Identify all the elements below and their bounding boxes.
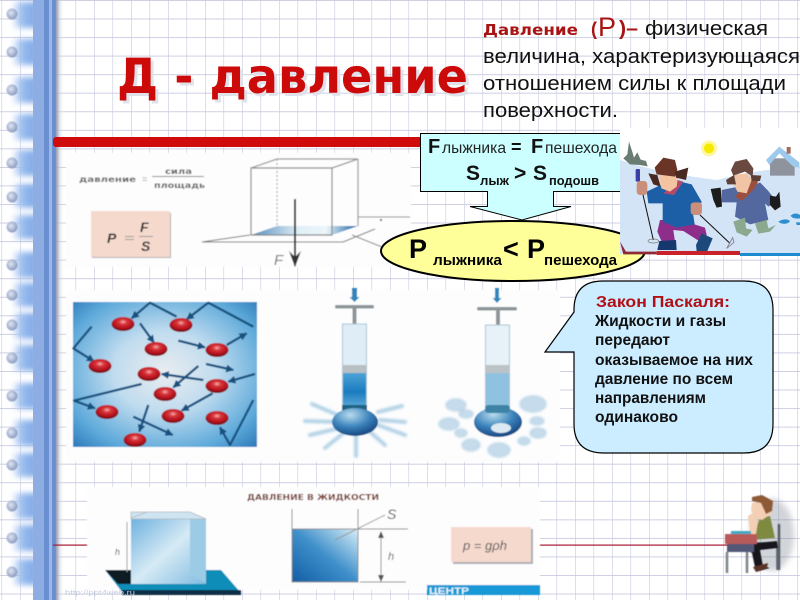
watermark: http://ppt4web.ru xyxy=(65,588,135,597)
logo strip xyxy=(427,585,540,596)
panel: pressure formula and box xyxy=(66,153,411,269)
definition of pressure: величина, характеризующаяся xyxy=(483,46,800,68)
liquid cube on plate: h xyxy=(115,547,120,557)
pedestrian xyxy=(711,159,781,237)
boy xyxy=(752,516,775,540)
chair xyxy=(778,524,780,570)
panel: Pascal law illustrations xyxy=(66,288,560,462)
definition of pressure: ( xyxy=(591,19,597,39)
formula in words: площадь xyxy=(154,181,205,190)
callout arrow box: force and area: лыжника xyxy=(442,140,506,157)
red thin line xyxy=(53,544,743,546)
syringe with foam xyxy=(439,288,546,457)
vessel with depth h: h xyxy=(388,551,394,563)
callout arrow box: force and area xyxy=(420,134,622,220)
red rule xyxy=(53,137,425,147)
definition of pressure: физическая xyxy=(645,18,768,40)
sun xyxy=(701,140,717,156)
formula in words: = xyxy=(142,174,147,184)
syringe with water jets xyxy=(305,288,405,456)
notebook binding strip xyxy=(6,0,64,600)
formula in words: сила xyxy=(165,167,192,176)
formula card p = gρh: р = gρh xyxy=(462,538,507,553)
callout arrow box: force and area: подошв xyxy=(549,173,599,188)
callout arrow box: force and area: S xyxy=(466,162,480,185)
definition of pressure: Давление xyxy=(483,21,578,39)
title: Д - давление xyxy=(117,49,468,105)
callout: Pascal's law: направлениям xyxy=(595,390,706,407)
callout: Pascal's law: одинаково xyxy=(595,409,678,426)
callout: Pascal's law: давление по всем xyxy=(595,371,733,388)
yellow ellipse: pressure comparison xyxy=(381,221,645,281)
formula card p = gρh xyxy=(451,527,533,564)
formula in words: давление xyxy=(79,175,137,184)
definition of pressure: поверхности. xyxy=(483,100,618,122)
formula card P = F/S: P xyxy=(107,230,117,246)
yellow ellipse: pressure comparison: лыжника xyxy=(433,253,503,269)
yellow ellipse: pressure comparison: Р xyxy=(527,234,545,264)
callout arrow box: force and area: лыж xyxy=(480,173,510,188)
definition of pressure: отношением силы к площади xyxy=(483,73,786,95)
desk xyxy=(731,531,751,534)
logo strip: ЦЕНТР xyxy=(429,586,469,596)
panel: pressure in liquid xyxy=(87,487,540,596)
callout arrow box: force and area: = xyxy=(511,137,522,157)
liquid cube on plate xyxy=(105,512,241,595)
callout arrow box: force and area: пешехода xyxy=(545,140,617,157)
callout: Pascal's law: Жидкости и газы xyxy=(594,313,726,330)
formula card P = F/S: S xyxy=(141,238,151,254)
picture: skier and pedestrian xyxy=(620,128,800,256)
gas molecules diagram xyxy=(73,302,257,447)
yellow ellipse: pressure comparison: Р xyxy=(409,234,427,264)
box on plane with force arrow xyxy=(202,159,410,269)
definition of pressure: )– xyxy=(619,18,638,40)
callout arrow box: force and area: > xyxy=(514,162,526,185)
callout: Pascal's law: оказываемое на них xyxy=(595,352,753,369)
vessel with depth h xyxy=(292,506,408,582)
distant tree xyxy=(623,142,648,166)
callout: Pascal's law: Закон Паскаля: xyxy=(596,294,730,311)
callout: Pascal's law xyxy=(545,281,773,453)
yellow ellipse: pressure comparison: < xyxy=(503,234,519,264)
yellow ellipse: pressure comparison: пешехода xyxy=(544,253,618,269)
formula in words xyxy=(79,167,205,190)
formula card P = F/S: F xyxy=(140,219,149,235)
callout arrow box: force and area: S xyxy=(533,162,547,185)
box on plane with force arrow: F xyxy=(274,252,284,269)
footprints xyxy=(778,213,800,225)
house xyxy=(766,147,799,176)
callout arrow box: force and area: F xyxy=(531,136,543,158)
skier xyxy=(636,158,734,251)
vessel with depth h: S xyxy=(387,506,397,522)
callout: Pascal's law: передают xyxy=(595,332,670,349)
panel heading: ДАВЛЕНИЕ В ЖИДКОСТИ xyxy=(247,493,379,502)
formula card P = F/S xyxy=(91,211,171,258)
definition of pressure: Р xyxy=(598,12,616,42)
callout arrow box: force and area: F xyxy=(428,136,440,158)
ski track xyxy=(620,242,800,256)
student at desk xyxy=(725,495,794,573)
title: Д - давление xyxy=(120,52,471,108)
definition of pressure xyxy=(483,12,800,122)
